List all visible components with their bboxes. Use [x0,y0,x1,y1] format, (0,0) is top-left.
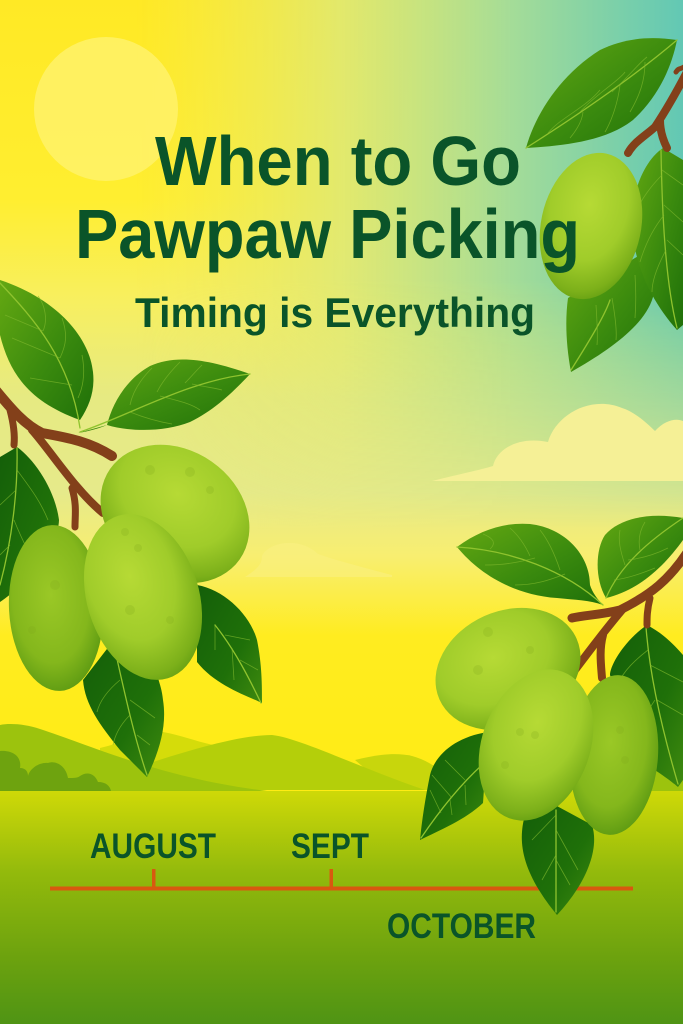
stems [0,388,112,456]
pawpaw branch: top right [526,38,683,372]
sun [34,37,178,181]
title: When to Go [155,122,521,200]
title [75,122,580,273]
label: sept: SEPT [291,827,369,866]
tick: august [152,869,156,889]
cloud: centre [245,543,392,577]
bushes [0,751,111,791]
timeline axis [50,886,633,890]
timeline [50,827,633,946]
pawpaw branch: lower right [416,516,683,915]
stems [572,548,683,618]
subtitle: Timing is Everything [135,289,535,336]
fruit speckles [473,627,629,769]
leaves [526,38,683,372]
pawpaw branch: left [0,280,276,777]
title: Pawpaw Picking [75,195,580,273]
hills [0,724,683,792]
sky background [0,0,683,795]
label: october: OCTOBER [387,907,536,946]
leaves [0,280,262,777]
cloud: upper right [432,404,683,481]
fruit [416,586,663,838]
fruit [5,416,276,695]
label: august: AUGUST [90,827,216,866]
leaves [420,516,683,915]
tick: september [330,869,333,889]
fruit [527,143,655,309]
fruit speckles [28,465,214,634]
stems [676,62,683,72]
ground field [0,791,683,1024]
